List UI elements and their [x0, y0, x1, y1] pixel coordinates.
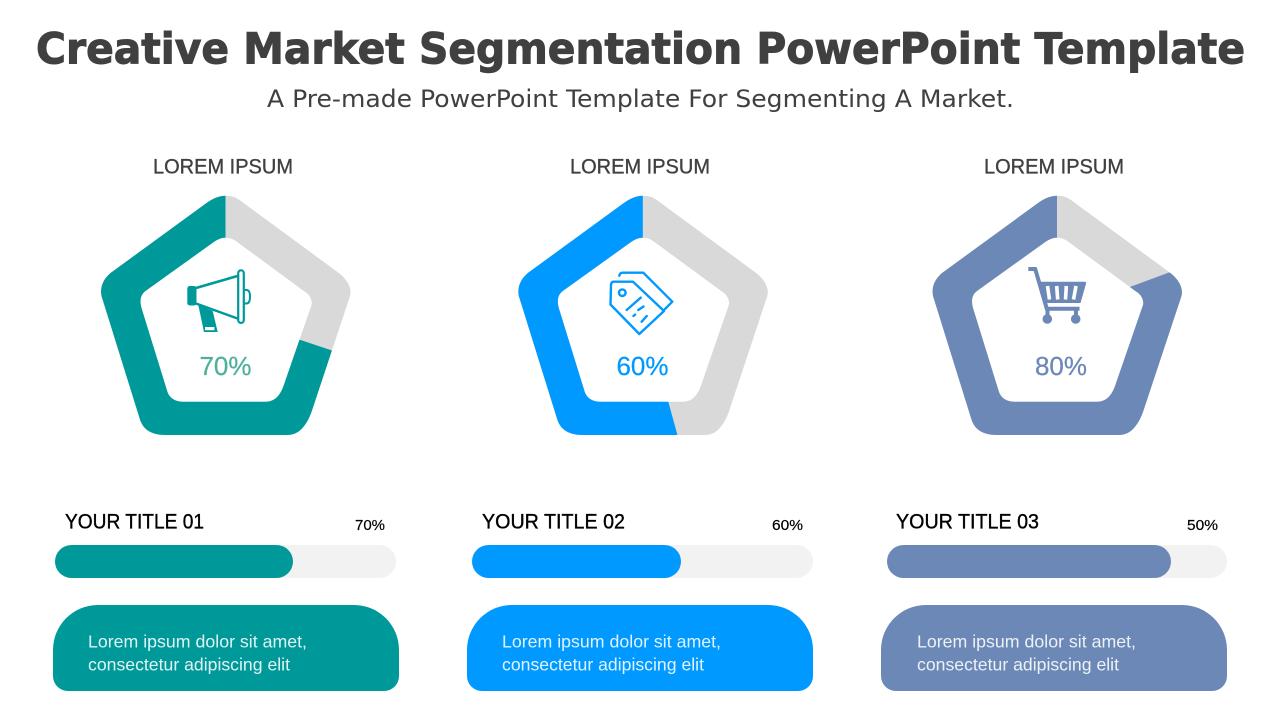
subtitle: A Pre-made PowerPoint Template For Segmenting A Market.	[267, 85, 1014, 113]
callout: Lorem ipsum dolor sit amet,	[917, 632, 1136, 652]
panel: segment 1	[53, 156, 399, 691]
bar title: YOUR TITLE 01	[65, 510, 204, 534]
heading: segment 3: LOREM IPSUM	[984, 156, 1124, 178]
callout: consectetur adipiscing elit	[88, 654, 290, 674]
panel: segment 3	[881, 156, 1227, 691]
icon: shopping cart	[1028, 269, 1086, 324]
callout	[53, 605, 399, 691]
callout: consectetur adipiscing elit	[502, 654, 704, 674]
heading: segment 2: LOREM IPSUM	[570, 156, 710, 178]
callout: consectetur adipiscing elit	[917, 654, 1119, 674]
progress bar	[472, 545, 813, 578]
value: 70%: 70%	[199, 351, 252, 381]
icon: price tags	[610, 273, 672, 334]
icon: megaphone	[187, 270, 250, 332]
bar title: YOUR TITLE 02	[482, 510, 625, 534]
callout: Lorem ipsum dolor sit amet,	[88, 632, 307, 652]
callout	[881, 605, 1227, 691]
callout: Lorem ipsum dolor sit amet,	[502, 632, 721, 652]
bar value: 70%	[355, 518, 385, 534]
bar value: 50%	[1187, 518, 1218, 534]
pentagon chart: 80%	[933, 196, 1182, 435]
title: Creative Market Segmentation PowerPoint Template	[36, 24, 1245, 74]
value: 60%: 60%	[616, 351, 669, 381]
progress bar	[887, 545, 1227, 578]
pentagon chart: 60%	[518, 196, 768, 435]
callout	[467, 605, 813, 691]
progress bar	[55, 545, 396, 578]
heading: segment 1: LOREM IPSUM	[153, 156, 293, 178]
panel: segment 2	[467, 156, 813, 691]
value: 80%: 80%	[1035, 351, 1087, 381]
bar value: 60%	[772, 518, 803, 534]
bar title: YOUR TITLE 03	[896, 510, 1039, 534]
pentagon chart: 70%	[101, 196, 350, 435]
